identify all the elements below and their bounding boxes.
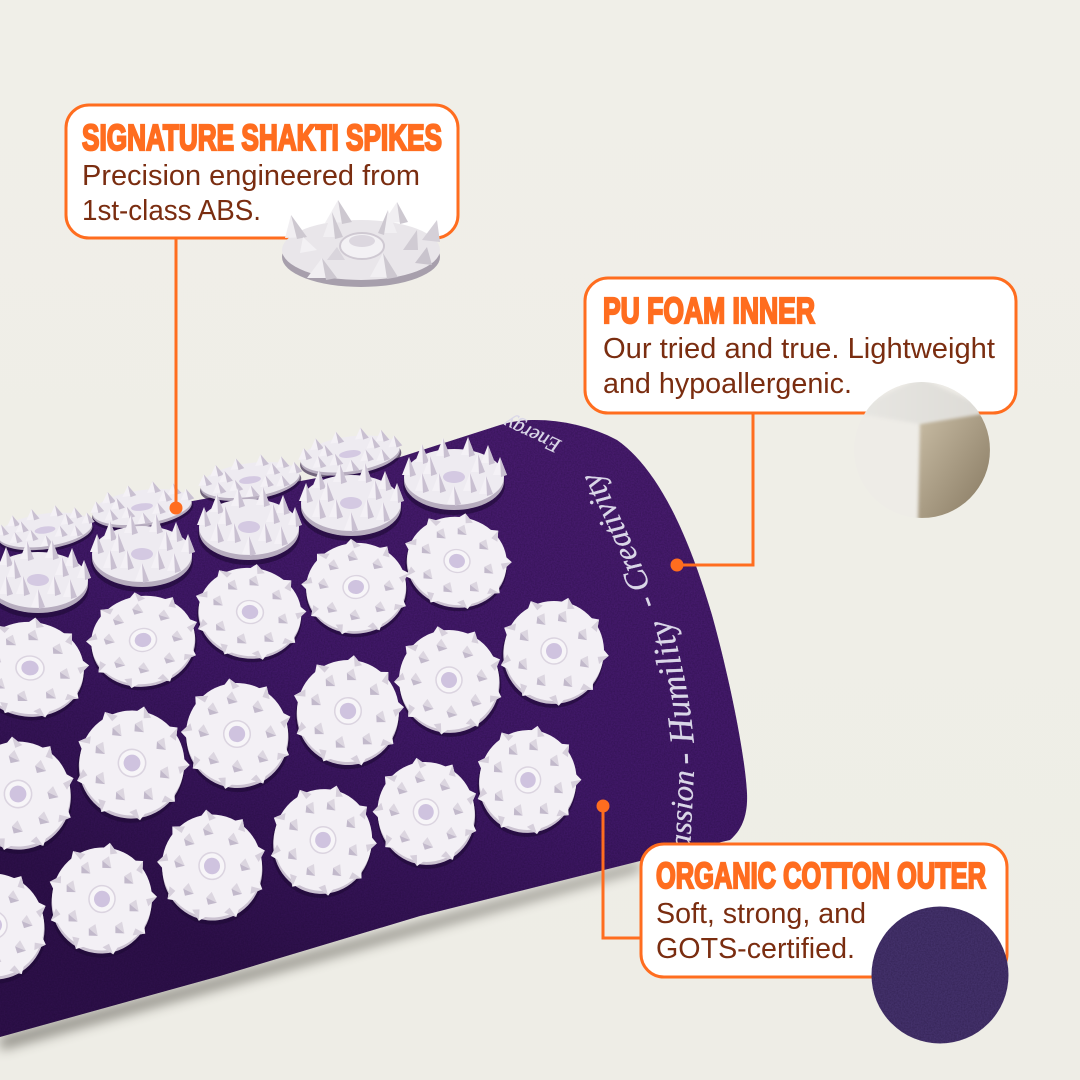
callout: signature shakti spikes <box>66 105 458 514</box>
embroidered text on pillow side: Energy <box>499 411 565 459</box>
leader line: spikes <box>170 238 182 514</box>
spike discs: front row <box>0 716 591 992</box>
icon: foam cube photo <box>864 382 990 518</box>
leader line: foam <box>670 413 753 572</box>
spike discs: fourth row <box>0 583 622 860</box>
callout: signature shakti spikes: 1st-class ABS. <box>82 195 261 227</box>
callout: organic cotton outer: Soft, strong, and <box>656 898 866 930</box>
callout: signature shakti spikes: SIGNATURE SHAKTI SPIKES <box>82 117 442 158</box>
icon: cotton fabric swatch <box>872 906 1008 1044</box>
leader line: cotton <box>596 800 641 938</box>
callout: PU foam inner: Our tried and true. Lightweight <box>603 333 995 365</box>
spike discs: back row <box>0 422 406 559</box>
pillow shadow <box>0 862 640 1050</box>
pillow body <box>0 420 747 1037</box>
callout: PU foam inner <box>585 278 1016 572</box>
embroidered text on pillow side: assion <box>672 772 694 842</box>
callout: organic cotton outer <box>596 800 1008 1044</box>
embroidered text on pillow side: - Humility <box>654 622 694 764</box>
embroidered text on pillow side <box>499 411 694 842</box>
callout: organic cotton outer: GOTS-certified. <box>656 933 855 965</box>
callout: PU foam inner: and hypoallergenic. <box>603 368 852 400</box>
spike discs: second row <box>0 437 507 618</box>
embroidered text on pillow side: - Creativity <box>585 476 651 606</box>
spike discs: third row <box>0 504 520 726</box>
icon: single spike disc <box>282 200 440 287</box>
callout: signature shakti spikes: Precision engineered from <box>82 160 420 192</box>
callout: PU foam inner: PU FOAM INNER <box>603 290 815 331</box>
